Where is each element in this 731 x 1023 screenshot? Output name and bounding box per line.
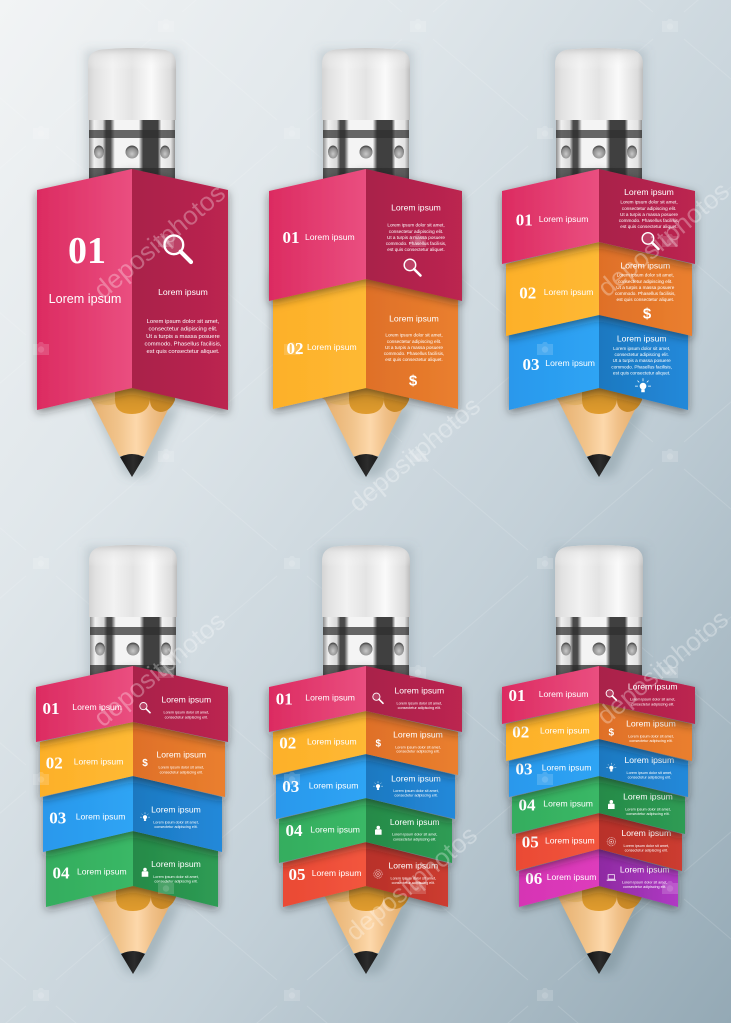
icon: magnifier [606, 690, 616, 700]
step 02 [506, 703, 692, 761]
step 02: 02 [286, 339, 304, 358]
icon: laptop [607, 875, 616, 881]
step 02: 02 [279, 733, 296, 752]
step 02: est quis consectetur aliquet. [385, 357, 443, 362]
step 06: 06 [525, 869, 542, 888]
step 01: Lorem ipsum [305, 693, 355, 703]
step 02 [40, 722, 225, 797]
step 03: Lorem ipsum [151, 804, 201, 814]
icon: dollar: $ [142, 758, 148, 769]
step 03 [509, 739, 688, 797]
step 04: consectetur adipiscing elit. [154, 880, 198, 884]
icon: dollar: $ [376, 738, 382, 750]
pencil 3 of row 2 [552, 545, 647, 975]
step 05: consectetur adipiscing elit. [392, 881, 435, 885]
step 01 [269, 666, 462, 732]
step 01: consectetur adipiscing elit. [631, 702, 674, 706]
step 01: commodo. Phasellus facilisis, [386, 241, 446, 246]
step 01: est quis consectetur aliquet. [620, 224, 678, 229]
step 01: Lorem ipsum dolor sit amet, [630, 698, 675, 702]
step 03 [509, 270, 688, 410]
step 02: Lorem ipsum [544, 287, 593, 297]
step 04 [512, 776, 685, 834]
body text: est quis consectetur aliquet. [146, 349, 220, 355]
step 04: Lorem ipsum [623, 791, 673, 801]
step 01: consectetur adipiscing elit. [398, 706, 441, 710]
step 04: Lorem ipsum [151, 859, 201, 869]
watermarks: depositphotos [340, 820, 483, 947]
icon: magnifier [404, 259, 420, 276]
step 03: Lorem ipsum dolor sit amet, [613, 346, 670, 351]
step 04: Lorem ipsum [310, 824, 360, 834]
step 05: 05 [288, 865, 306, 884]
icon: light bulb [373, 781, 383, 790]
step 01: 01 [282, 228, 300, 247]
step 03: Lorem ipsum [309, 780, 358, 790]
watermarks: depositphotos [88, 178, 231, 305]
step 06: consectetur adipiscing elit. [623, 885, 666, 889]
step 04: 04 [52, 863, 70, 882]
step 01: Lorem ipsum [394, 685, 444, 695]
icon: light bulb [606, 763, 616, 772]
step 02 [273, 711, 458, 775]
step 03 [43, 776, 222, 852]
watermarks: depositphotos [592, 176, 731, 303]
step 05: Lorem ipsum [388, 861, 438, 871]
body text: commodo. Phasellus facilisis, [145, 342, 222, 348]
step 03: Lorem ipsum [542, 762, 591, 772]
step 02: Lorem ipsum dolor sit amet, [628, 734, 674, 738]
step 05: Lorem ipsum dolor sit amet, [391, 876, 436, 880]
step 03: consectetur adipiscing elit. [628, 776, 671, 780]
step 02: est quis consectetur aliquet. [617, 297, 674, 302]
step 03: Lorem ipsum [391, 773, 441, 783]
step 01: Lorem ipsum dolor sit amet, [397, 701, 442, 705]
step 04: 04 [518, 796, 536, 815]
icon: person [375, 826, 382, 835]
step 01 [269, 169, 462, 301]
icon: magnifier [164, 235, 191, 262]
step 02: consectetur adipiscing elit. [387, 339, 441, 344]
step 01 [502, 169, 695, 264]
step 01: 01 [508, 686, 526, 705]
step 03: Lorem ipsum dolor sit amet, [393, 789, 439, 793]
panel: one-step card [37, 169, 228, 410]
icon: light bulb [635, 378, 651, 392]
step 06: Lorem ipsum [547, 872, 596, 882]
step 06: Lorem ipsum dolor sit amet, [622, 880, 667, 884]
icon: target [607, 838, 616, 846]
step 02: Lorem ipsum dolor sit amet, [159, 765, 204, 769]
step 02: Lorem ipsum [393, 729, 443, 739]
step 01: consectetur adipiscing elit. [389, 229, 443, 234]
left label: Lorem ipsum [49, 292, 121, 306]
step 01: Lorem ipsum [391, 203, 441, 213]
step 01: Lorem ipsum [624, 187, 674, 197]
step 01: Lorem ipsum [161, 695, 211, 705]
step 01: est quis consectetur aliquet. [387, 247, 445, 252]
icon: magnifier [642, 233, 658, 249]
step 02: Lorem ipsum [626, 718, 676, 728]
step 02: Lorem ipsum dolor sit amet, [617, 273, 674, 278]
step 04: Lorem ipsum dolor sit amet, [153, 875, 199, 879]
step 01: Lorem ipsum dolor sit amet, [620, 200, 678, 205]
step 03: Lorem ipsum [545, 358, 595, 368]
step 02: Lorem ipsum [156, 749, 206, 759]
step 04: 04 [286, 821, 303, 840]
step 01: 01 [42, 699, 60, 718]
step 01: Lorem ipsum [628, 682, 678, 692]
step 03: 03 [522, 355, 540, 374]
step 04: consectetur adipiscing elit. [393, 837, 436, 841]
step 03: consectetur adipiscing elit. [394, 794, 438, 798]
step 03: commodo. Phasellus facilisis, [611, 364, 672, 369]
body text: Lorem ipsum dolor sit amet, [147, 319, 220, 325]
step 02: Lorem ipsum [540, 726, 590, 736]
step 01: 01 [516, 210, 533, 229]
step 03: Lorem ipsum [617, 333, 667, 343]
step 03: consectetur adipiscing elit. [614, 352, 669, 357]
step 02: Lorem ipsum [620, 260, 670, 270]
step 01 [36, 666, 228, 742]
step 01: 01 [276, 689, 293, 708]
step 02: Lorem ipsum dolor sit amet, [385, 333, 443, 338]
body text: Ut a turpis a massa posuere [146, 334, 221, 340]
step 05: consectetur adipiscing elit. [625, 849, 668, 853]
step 03: Lorem ipsum dolor sit amet, [627, 771, 672, 775]
step 02: consectetur adipiscing elit. [618, 279, 673, 284]
step 02: commodo. Phasellus facilisis, [384, 351, 444, 356]
step 02: Ut a turpis a massa posuere [616, 285, 675, 290]
step 02: Lorem ipsum [307, 342, 357, 352]
step 04: Lorem ipsum dolor sit amet, [392, 833, 437, 837]
icon: person [608, 800, 615, 809]
step 01: consectetur adipiscing elit. [165, 715, 208, 719]
step 05: Lorem ipsum [545, 835, 595, 845]
step 02: 02 [46, 754, 63, 773]
step 02 [506, 242, 692, 336]
step 01: Lorem ipsum [305, 232, 355, 242]
step 06 [519, 849, 678, 907]
step 03: Ut a turpis a massa posuere [613, 358, 671, 363]
number 01: 01 [68, 230, 106, 272]
step 04 [279, 798, 452, 863]
step 01: Lorem ipsum [539, 214, 588, 224]
step 02 [273, 250, 458, 409]
panel: two-step card [269, 169, 462, 409]
icon: dollar: $ [609, 728, 615, 738]
step 01: Lorem ipsum dolor sit amet, [387, 223, 445, 228]
icon: target [374, 870, 382, 878]
step 02: consectetur adipiscing elit. [629, 739, 673, 743]
step 01: consectetur adipiscing elit. [622, 206, 676, 211]
step 05: Lorem ipsum [621, 828, 671, 838]
watermarks: depositphotos [343, 391, 486, 518]
step 03: 03 [516, 759, 532, 778]
step 01: Ut a turpis a massa posuere [620, 212, 678, 217]
pencil 2 of row 2 [319, 545, 414, 975]
panel: three-step card [502, 169, 695, 410]
step 04 [46, 831, 218, 907]
step 02: Lorem ipsum [389, 313, 439, 323]
step 05: Lorem ipsum dolor sit amet, [624, 844, 669, 848]
step 01: commodo. Phasellus facilisis, [619, 218, 679, 223]
step 04: Lorem ipsum [77, 866, 127, 876]
step 04: consectetur adipiscing elit. [626, 812, 670, 816]
step 05: 05 [522, 832, 539, 851]
pencil 1 of row 1 [85, 48, 180, 478]
step 03: Lorem ipsum [76, 811, 125, 821]
step 01: Ut a turpis a massa posuere [387, 235, 445, 240]
step 01 [502, 666, 695, 724]
step 05: Lorem ipsum [312, 868, 361, 878]
panel: five-step card [269, 666, 462, 907]
panel: four-step card [36, 666, 228, 907]
body text: consectetur adipiscing elit. [148, 326, 218, 332]
watermarks: depositphotos [88, 606, 231, 733]
icon: dollar: $ [643, 306, 652, 322]
step 03 [276, 754, 455, 819]
watermarks: depositphotos [591, 604, 731, 731]
step 04: Lorem ipsum [390, 817, 440, 827]
icon: light bulb [140, 812, 150, 821]
step 02: Lorem ipsum dolor sit amet, [395, 745, 441, 749]
step 01: Lorem ipsum [72, 702, 122, 712]
step 01: Lorem ipsum [539, 689, 588, 699]
step 03: consectetur adipiscing elit. [154, 825, 198, 829]
watermarks [88, 176, 731, 947]
panel: six-step card [502, 666, 695, 907]
step 06: Lorem ipsum [620, 865, 670, 875]
step 04: Lorem ipsum dolor sit amet, [625, 807, 671, 811]
step 04: Lorem ipsum [543, 799, 593, 809]
step 03: 03 [49, 808, 66, 827]
step 02: consectetur adipiscing elit. [160, 770, 203, 774]
step 03: 03 [282, 777, 299, 796]
pencil 1 of row 2 [86, 545, 181, 975]
step 02: consectetur adipiscing elit. [396, 750, 440, 754]
icon: magnifier [373, 693, 383, 703]
step 02: Lorem ipsum [307, 737, 357, 747]
icon: magnifier [140, 702, 150, 713]
right label: Lorem ipsum [158, 287, 208, 297]
step 02: Ut a turpis a massa posuere [385, 345, 443, 350]
step 03: est quis consectetur aliquet. [613, 370, 670, 375]
step 03: Lorem ipsum dolor sit amet, [153, 820, 199, 824]
icon: dollar: $ [409, 372, 418, 390]
icon: person [142, 868, 148, 877]
step 05 [283, 842, 448, 907]
step 02: 02 [519, 284, 536, 303]
pencil 2 of row 1 [319, 48, 414, 478]
pencil 3 of row 1 [552, 48, 647, 478]
step 02: 02 [512, 723, 529, 742]
step 02: commodo. Phasellus facilisis, [615, 291, 676, 296]
step 01: Lorem ipsum dolor sit amet, [164, 710, 209, 714]
step 02: Lorem ipsum [74, 757, 123, 767]
step 05 [516, 813, 682, 871]
step 03: Lorem ipsum [624, 755, 674, 765]
